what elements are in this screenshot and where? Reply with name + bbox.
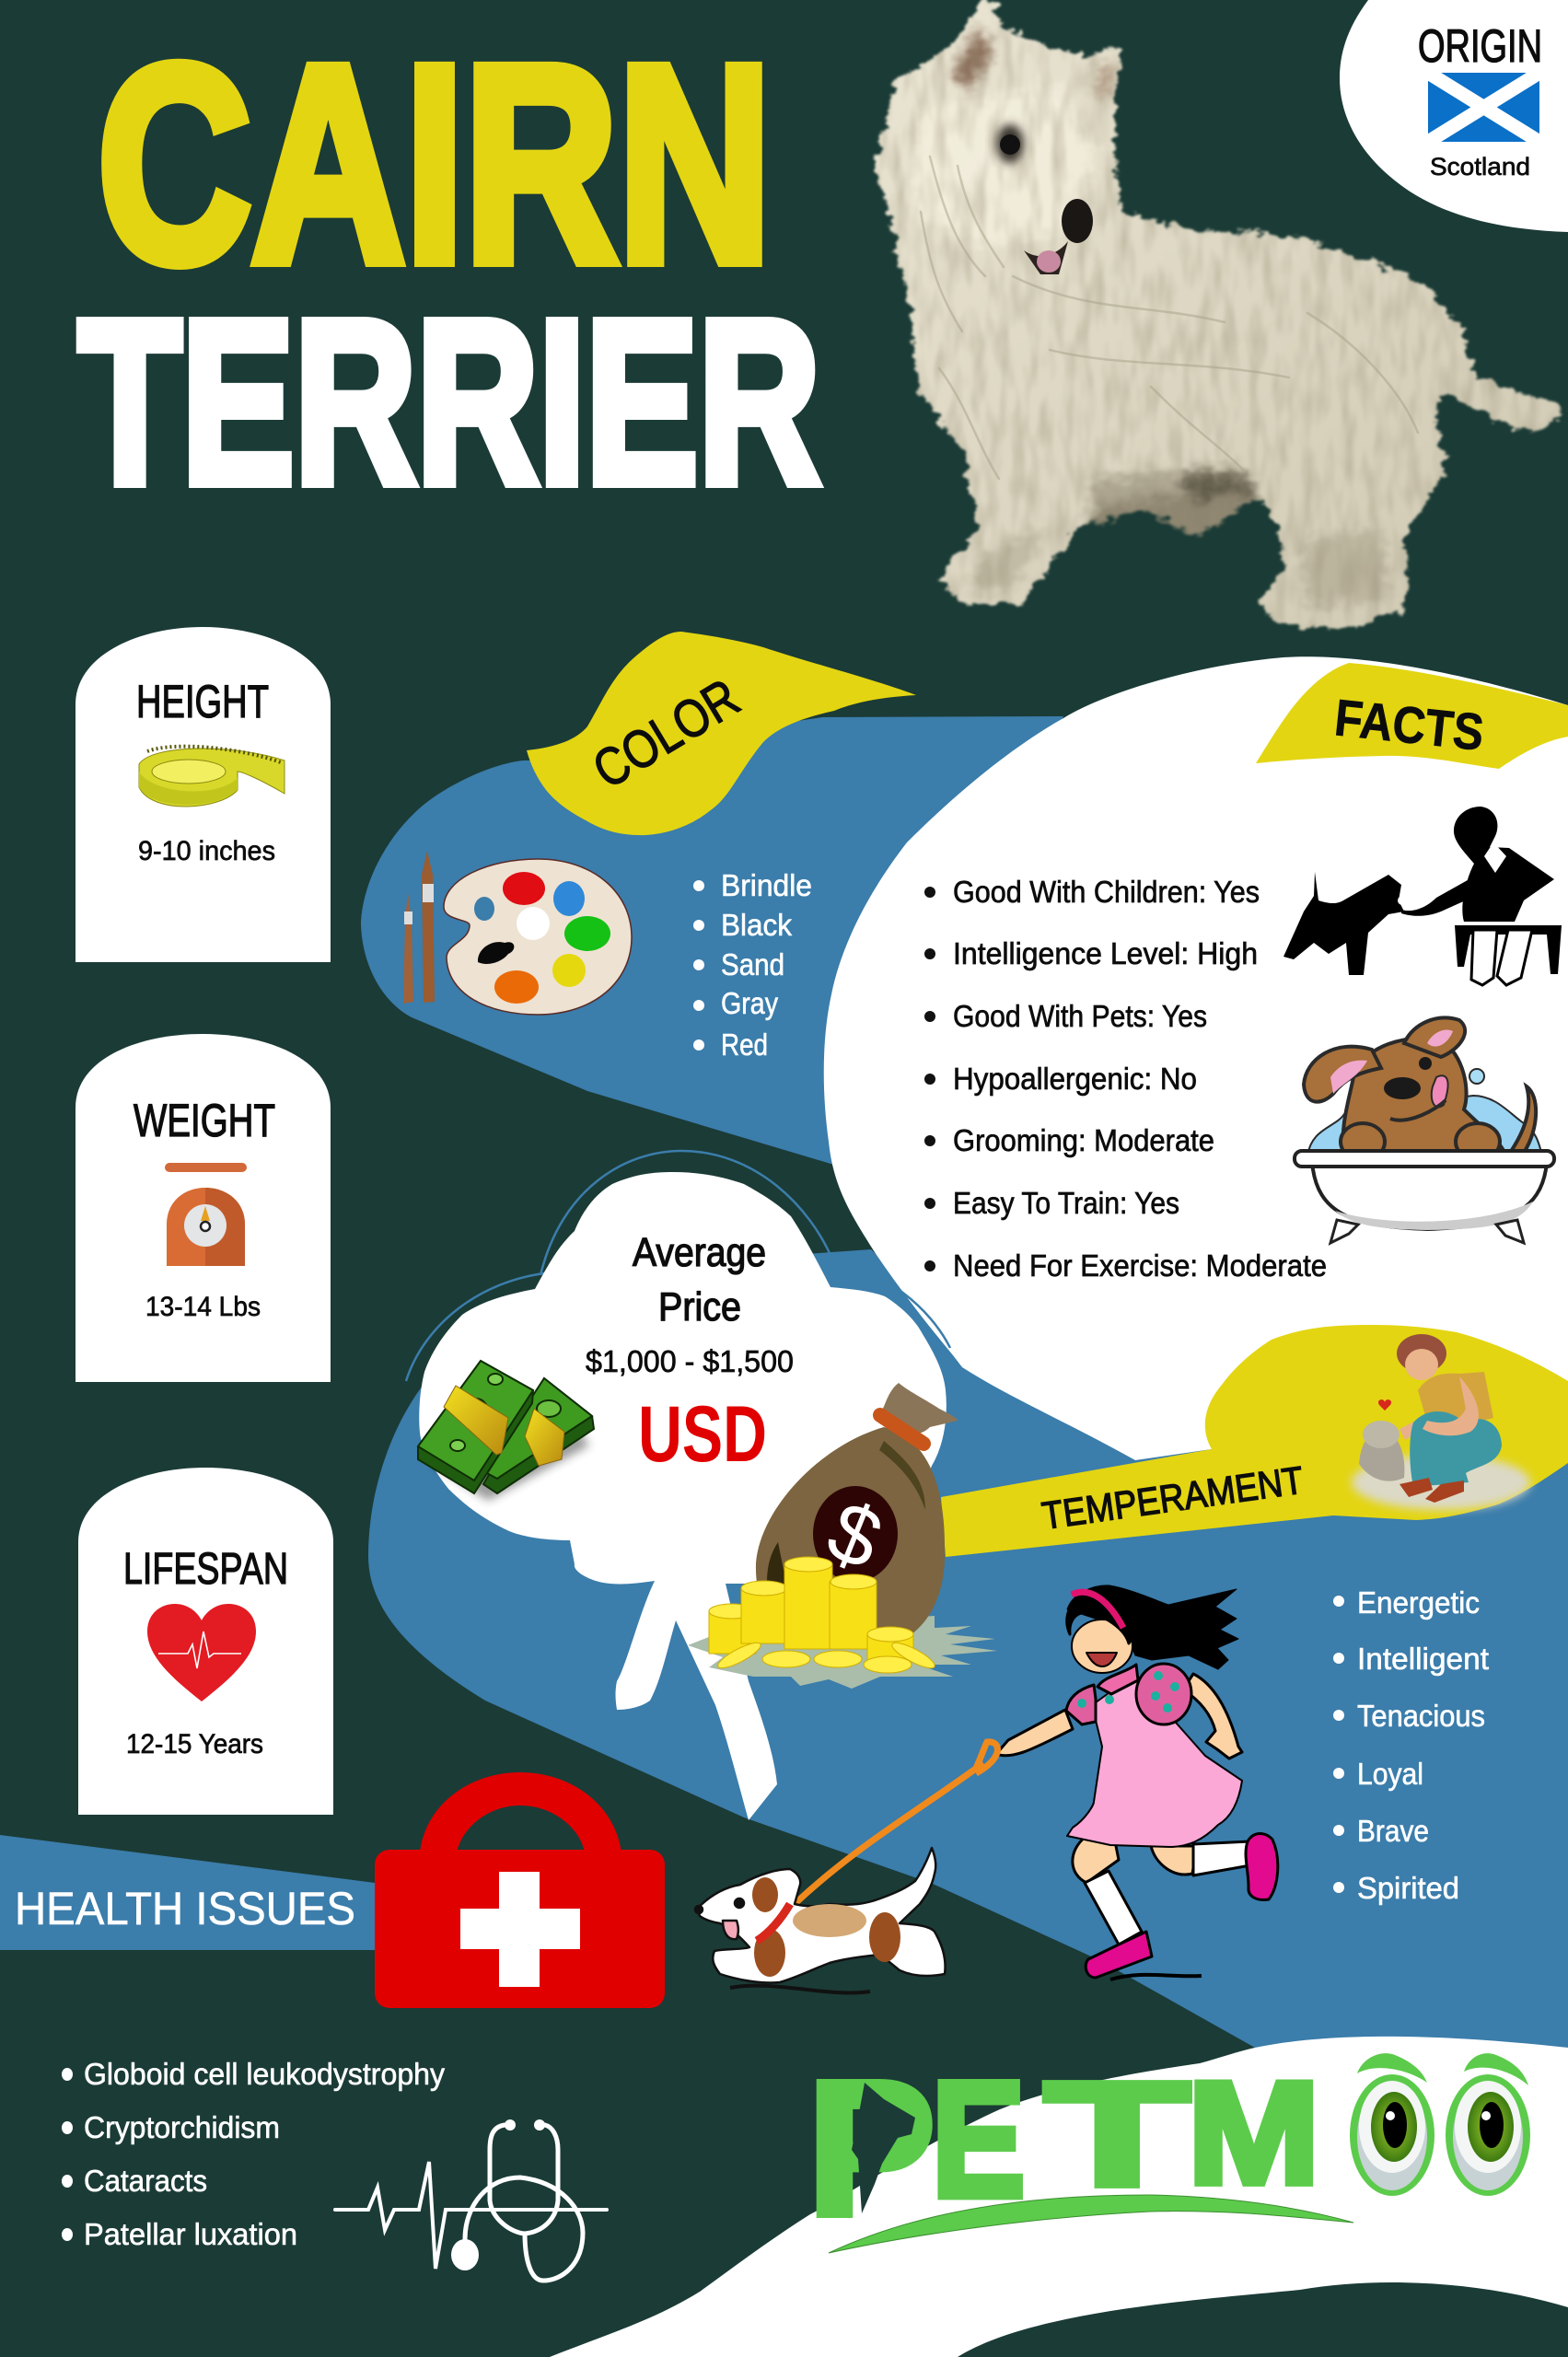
icon: money bag: $ bbox=[815, 1483, 894, 1588]
heading ribbon: temperament: TEMPERAMENT bbox=[1040, 1458, 1306, 1538]
heading ribbon: color bbox=[527, 632, 916, 835]
list: facts: Hypoallergenic: No bbox=[953, 1062, 1197, 1096]
list: temperament: Energetic bbox=[1357, 1585, 1480, 1620]
price heading: Average bbox=[633, 1230, 766, 1275]
logo: petmoo: T bbox=[1045, 2052, 1190, 2216]
weight heading: WEIGHT bbox=[134, 1095, 275, 1146]
icon: heart with pulse bbox=[147, 1604, 256, 1701]
origin country: Scotland bbox=[1430, 153, 1530, 180]
price currency: USD bbox=[638, 1390, 767, 1479]
icon: first aid kit bbox=[375, 1772, 665, 2008]
heading ribbon: temperament bbox=[941, 1325, 1568, 1557]
list: temperament bbox=[1333, 1585, 1489, 1905]
icon: child petting puppy bbox=[1352, 1334, 1530, 1510]
weight value: 13-14 Lbs bbox=[145, 1292, 261, 1322]
logo swoosh bbox=[829, 2195, 1353, 2253]
panel: weight bbox=[75, 1034, 331, 1382]
title: terrier: TERRIER bbox=[78, 272, 820, 532]
icon: gold coins bbox=[709, 1557, 937, 1673]
list: colors: Brindle bbox=[721, 868, 812, 902]
panel: color blue blob bbox=[361, 716, 1063, 1166]
heading ribbon: facts: FACTS bbox=[1332, 688, 1486, 761]
icon: money stacks bbox=[418, 1361, 594, 1501]
icon: dog in bathtub bbox=[1295, 1018, 1554, 1243]
list: health issues bbox=[62, 2057, 445, 2251]
lifespan heading: LIFESPAN bbox=[123, 1545, 288, 1594]
icon: child feeding dog silhouette bbox=[1283, 807, 1562, 985]
list: facts: Intelligence Level: High bbox=[953, 936, 1258, 970]
panel: logo white swoosh bbox=[550, 2037, 1568, 2357]
icon: measuring tape bbox=[139, 747, 285, 807]
panel: origin bbox=[1340, 0, 1568, 232]
list: temperament: Brave bbox=[1357, 1814, 1429, 1848]
price range: $1,000 - $1,500 bbox=[586, 1344, 794, 1378]
icon: burst under coins bbox=[688, 1616, 997, 1689]
list: health issues: Cryptorchidism bbox=[84, 2110, 280, 2144]
height heading: HEIGHT bbox=[136, 676, 269, 727]
list: temperament: Loyal bbox=[1357, 1757, 1423, 1791]
panel: temperament blue field bbox=[368, 1249, 1568, 2048]
panel: price cloud bbox=[406, 1151, 950, 1820]
list: health issues: Globoid cell leukodystrophy bbox=[84, 2057, 445, 2091]
heading ribbon: facts bbox=[1256, 663, 1568, 769]
panel: facts white blob bbox=[824, 656, 1568, 1460]
panel: health issues banner: HEALTH ISSUES bbox=[15, 1883, 355, 1934]
panel: health issues banner bbox=[0, 1835, 375, 1950]
panel: height bbox=[75, 627, 331, 962]
list: facts: Grooming: Moderate bbox=[953, 1123, 1214, 1157]
logo: petmoo: M bbox=[1188, 2052, 1319, 2214]
icon: scottish flag bbox=[1428, 73, 1539, 142]
list: colors bbox=[693, 868, 812, 1062]
list: facts: Good With Pets: Yes bbox=[953, 999, 1207, 1033]
photo: cairn terrier dog bbox=[875, 0, 1568, 630]
list: facts bbox=[924, 875, 1327, 1283]
illustration: running dog bbox=[695, 1848, 946, 1993]
panel: lifespan bbox=[78, 1468, 333, 1815]
lifespan value: 12-15 Years bbox=[126, 1729, 263, 1759]
list: colors: Red bbox=[721, 1028, 768, 1062]
illustration: girl running bbox=[996, 1585, 1278, 1980]
icon: stethoscope with pulse bbox=[335, 2119, 607, 2281]
list: health issues: Patellar luxation bbox=[84, 2217, 297, 2251]
logo: petmoo: P bbox=[808, 2043, 935, 2254]
icon: paint palette bbox=[444, 859, 632, 1015]
list: facts: Good With Children: Yes bbox=[953, 875, 1260, 909]
heading ribbon: color: COLOR bbox=[583, 668, 749, 800]
logo eyes bbox=[1350, 2053, 1530, 2196]
list: colors: Sand bbox=[721, 947, 784, 981]
list: facts: Need For Exercise: Moderate bbox=[953, 1248, 1327, 1283]
icon: paint brushes bbox=[403, 851, 435, 1004]
list: health issues: Cataracts bbox=[84, 2164, 207, 2198]
height value: 9-10 inches bbox=[138, 836, 275, 866]
list: colors: Black bbox=[721, 908, 792, 942]
list: colors: Gray bbox=[721, 986, 778, 1020]
list: temperament: Spirited bbox=[1357, 1871, 1459, 1905]
list: temperament: Intelligent bbox=[1357, 1642, 1489, 1676]
icon: orange leash bbox=[795, 1742, 997, 1904]
price heading second line: Price bbox=[658, 1284, 741, 1329]
list: facts: Easy To Train: Yes bbox=[953, 1186, 1179, 1220]
title: cairn: CAIRN bbox=[98, 8, 772, 320]
icon: money bag bbox=[756, 1383, 958, 1634]
list: temperament: Tenacious bbox=[1357, 1699, 1485, 1733]
logo: petmoo: E bbox=[932, 2048, 1025, 2232]
logo: petmoo bbox=[808, 2043, 1530, 2254]
icon: scale bbox=[165, 1163, 247, 1266]
